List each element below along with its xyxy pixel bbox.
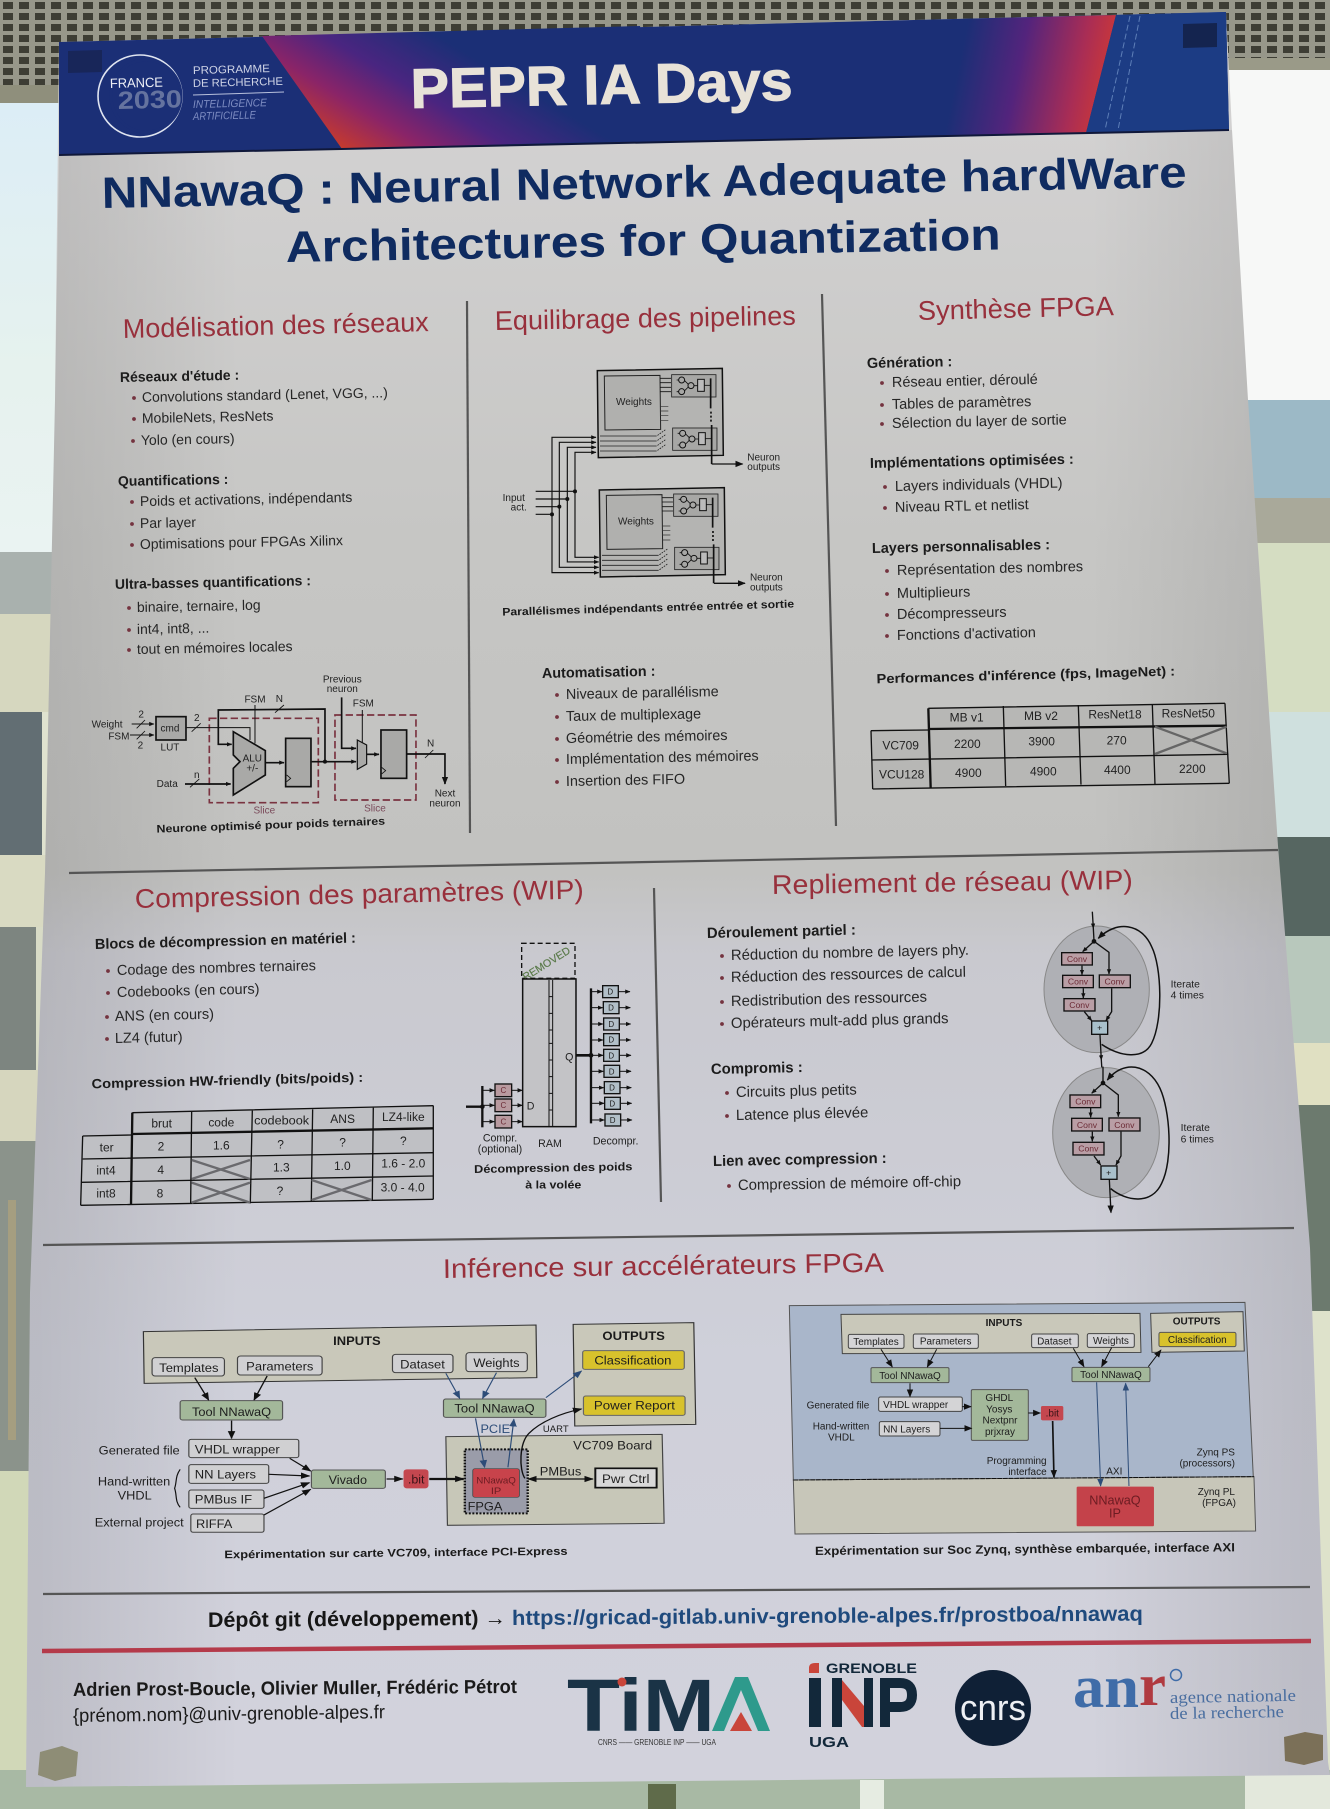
diagram: soc Zynq: Yosys bbox=[986, 1404, 1012, 1415]
diagram: neurone optimisé: Data bbox=[157, 779, 178, 790]
diagram: réseau replié: 6 times bbox=[1181, 1134, 1214, 1145]
diagram: carte VC709: Tool NNawaQ bbox=[454, 1402, 535, 1415]
list: blocs de décompression: ANS (en cours) bbox=[115, 1007, 214, 1025]
diagram: carte VC709: VC709 Board bbox=[573, 1439, 652, 1452]
diagram: soc Zynq: .bit bbox=[1046, 1409, 1059, 1420]
tape pieces bbox=[38, 1732, 1323, 1781]
logo text: programme de recherche bbox=[192, 63, 284, 123]
diagram: décompression RAM bbox=[466, 943, 638, 1191]
logo: France 2030 bbox=[98, 55, 182, 137]
diagram: carte VC709: INPUTS bbox=[333, 1334, 381, 1348]
title bbox=[101, 148, 1187, 272]
list: ultra-basses quantifications: binaire, ternaire, log bbox=[137, 597, 261, 615]
diagram: soc Zynq: Zynq PL bbox=[1198, 1487, 1235, 1498]
diagram: carte VC709: Weights bbox=[473, 1356, 520, 1370]
diagram: carte VC709: VHDL wrapper bbox=[195, 1442, 280, 1456]
diagram: neurone optimisé: 2 bbox=[138, 741, 144, 752]
diagram: décompression RAM: D bbox=[609, 1067, 615, 1076]
iterate 4 block: Conv bbox=[1067, 954, 1088, 964]
list: lien avec compression bbox=[713, 1151, 961, 1194]
list: compromis bbox=[711, 1060, 869, 1124]
performance table: 270 bbox=[1107, 733, 1127, 747]
diagram: soc Zynq: Tool NNawaQ bbox=[879, 1371, 941, 1382]
iterate 6 block: Conv bbox=[1077, 1120, 1098, 1130]
authors: Adrien Prost-Boucle, Olivier Muller, Frédéric Pétrot bbox=[73, 1677, 518, 1701]
iterate 4 block: Conv bbox=[1105, 977, 1125, 987]
diagram: soc Zynq: Templates bbox=[853, 1337, 899, 1348]
git repository line bbox=[208, 1603, 1143, 1632]
compression table: Compression HW-friendly (bits/poids) : bbox=[91, 1070, 363, 1091]
diagram: pipelines: Weights bbox=[618, 517, 654, 528]
heading: Repliement de réseau (WIP) bbox=[772, 865, 1133, 900]
diagram: décompression RAM: REMOVED bbox=[521, 945, 573, 983]
banner bbox=[59, 12, 1229, 155]
diagram: neurone optimisé: N bbox=[427, 739, 434, 750]
diagram: carte VC709: NN Layers bbox=[195, 1468, 256, 1481]
list: compromis: Circuits plus petits bbox=[736, 1082, 857, 1101]
diagram: carte VC709: FPGA bbox=[468, 1500, 503, 1513]
logo: CNRS: cnrs bbox=[960, 1687, 1026, 1728]
list: layers personnalisables: Décompresseurs bbox=[897, 605, 1007, 623]
diagram: décompression RAM: Décompression des poids bbox=[474, 1161, 633, 1176]
list: blocs de décompression: LZ4 (futur) bbox=[115, 1029, 183, 1047]
diagram: neurone optimisé: 2 bbox=[138, 709, 144, 720]
list: layers personnalisables: Fonctions d'activation bbox=[897, 625, 1036, 644]
diagram: carte VC709 bbox=[95, 1323, 696, 1561]
diagram: soc Zynq: Generated file bbox=[807, 1401, 870, 1412]
diagram: réseau replié: Iterate bbox=[1181, 1123, 1210, 1134]
logo: ANR: agence nationale bbox=[1170, 1686, 1296, 1707]
list: déroulement partiel: Déroulement partiel : bbox=[707, 923, 856, 942]
diagram: soc Zynq: Classification bbox=[1168, 1335, 1227, 1346]
diagram: pipelines: outputs bbox=[750, 582, 783, 593]
compression table: ANS bbox=[330, 1112, 355, 1126]
list: réseaux d'étude: MobileNets, ResNets bbox=[142, 407, 274, 426]
diagram: soc Zynq: Parameters bbox=[920, 1337, 971, 1348]
compression table: ? bbox=[400, 1134, 407, 1148]
diagram: carte VC709: UART bbox=[543, 1425, 569, 1435]
performance table: ResNet50 bbox=[1162, 706, 1215, 720]
logo: CNRS bbox=[955, 1670, 1031, 1746]
diagram: carte VC709: Vivado bbox=[329, 1473, 367, 1487]
panel: equilibrage des pipelines bbox=[495, 301, 796, 790]
diagram: neurone optimisé: ALU bbox=[243, 754, 262, 765]
list: génération bbox=[867, 354, 1067, 432]
diagram: carte VC709: PCIE bbox=[480, 1422, 510, 1436]
heading: Compression des paramètres (WIP) bbox=[134, 875, 584, 914]
list: ultra-basses quantifications bbox=[115, 572, 311, 657]
list: quantifications bbox=[118, 471, 353, 552]
diagram: carte VC709: Templates bbox=[159, 1361, 219, 1375]
panel: modélisation des réseaux bbox=[92, 307, 461, 836]
iterate 6 block: Conv bbox=[1075, 1096, 1096, 1106]
diagram: carte VC709: Parameters bbox=[246, 1359, 314, 1373]
list: déroulement partiel bbox=[707, 923, 969, 1032]
diagram: carte VC709: Hand-written bbox=[98, 1474, 170, 1488]
diagram: neurone optimisé bbox=[92, 675, 461, 836]
title: NNawaQ : Neural Network Adequate hardWare bbox=[101, 148, 1187, 218]
diagram: soc Zynq: GHDL bbox=[985, 1393, 1014, 1404]
list: blocs de décompression: Blocs de décompression en matériel : bbox=[95, 931, 356, 953]
diagram: carte VC709: IP bbox=[491, 1487, 501, 1497]
heading: Inférence sur accélérateurs FPGA bbox=[443, 1248, 884, 1284]
diagram: soc Zynq: prjxray bbox=[985, 1427, 1015, 1438]
diagram: décompression RAM: D bbox=[608, 1051, 614, 1060]
compression table: 1.6 bbox=[213, 1138, 230, 1152]
list: automatisation: Géométrie des mémoires bbox=[566, 728, 728, 747]
diagram: neurone optimisé: FSM bbox=[108, 731, 129, 742]
diagram: carte VC709: Generated file bbox=[99, 1443, 180, 1457]
list: layers personnalisables: Représentation des nombres bbox=[897, 559, 1083, 579]
list: quantifications: Par layer bbox=[140, 514, 196, 531]
logo: ANR: an bbox=[1073, 1654, 1139, 1720]
diagram: décompression RAM: RAM bbox=[538, 1138, 562, 1150]
diagram: neurone optimisé: neuron bbox=[429, 798, 461, 809]
list: blocs de décompression: Codebooks (en cours) bbox=[117, 982, 260, 1001]
diagram: soc Zynq: Programming bbox=[987, 1456, 1047, 1467]
compression table: brut bbox=[151, 1117, 173, 1131]
diagram: carte VC709: RIFFA bbox=[196, 1517, 233, 1531]
diagram: pipelines: Neuron bbox=[747, 453, 780, 464]
list: réseaux d'étude: Réseaux d'étude : bbox=[120, 367, 239, 385]
list: automatisation: Insertion des FIFO bbox=[566, 772, 685, 790]
diagram: neurone optimisé: Neurone optimisé pour poids ternaires bbox=[156, 816, 385, 836]
diagram: soc Zynq: Zynq PS bbox=[1197, 1448, 1235, 1459]
compression table: LZ4-like bbox=[382, 1110, 425, 1124]
compression table: 8 bbox=[157, 1187, 164, 1201]
logo: Grenoble INP bbox=[809, 1661, 917, 1751]
diagram: décompression RAM: D bbox=[609, 1099, 615, 1108]
diagram: décompression RAM: D bbox=[608, 1004, 614, 1013]
list: génération: Sélection du layer de sortie bbox=[892, 412, 1067, 432]
list: réseaux d'étude: Yolo (en cours) bbox=[141, 430, 235, 448]
diagram: carte VC709: Tool NNawaQ bbox=[192, 1405, 271, 1419]
logo: ANR bbox=[1073, 1652, 1296, 1723]
list: automatisation: Taux de multiplexage bbox=[566, 706, 701, 725]
diagram: carte VC709: VHDL bbox=[118, 1489, 152, 1502]
iterate 4 block: + bbox=[1097, 1023, 1102, 1033]
diagram: soc Zynq: VHDL bbox=[828, 1432, 855, 1443]
diagram: décompression RAM: à la volée bbox=[525, 1179, 581, 1191]
compression table: 2 bbox=[158, 1140, 165, 1154]
diagram: soc Zynq: INPUTS bbox=[986, 1318, 1023, 1329]
list: déroulement partiel: Redistribution des ressources bbox=[731, 990, 927, 1010]
list: lien avec compression: Compression de mémoire off-chip bbox=[738, 1174, 961, 1194]
title: Architectures for Quantization bbox=[285, 211, 1001, 272]
list: layers personnalisables: Layers personnalisables : bbox=[872, 537, 1050, 557]
diagram: carte VC709: Power Report bbox=[594, 1398, 675, 1412]
list: layers personnalisables bbox=[872, 537, 1083, 644]
list: quantifications: Poids et activations, indépendants bbox=[140, 489, 353, 509]
performance table: 2200 bbox=[954, 737, 981, 751]
diagram: réseau replié: Iterate bbox=[1171, 979, 1200, 990]
diagram: décompression RAM: D bbox=[607, 988, 613, 997]
performance table: MB v1 bbox=[950, 710, 984, 724]
diagram: soc Zynq: OUTPUTS bbox=[1173, 1317, 1221, 1328]
compression table: int8 bbox=[96, 1187, 116, 1201]
logo: ANR: de la recherche bbox=[1170, 1702, 1284, 1723]
compression table: codebook bbox=[254, 1113, 310, 1127]
compression table: int4 bbox=[96, 1163, 116, 1177]
logo: France 2030: 2030 bbox=[117, 85, 182, 115]
diagram: réseau replié bbox=[1044, 912, 1214, 1213]
diagram: carte VC709: PMBus bbox=[540, 1465, 582, 1478]
list: compromis: Compromis : bbox=[711, 1060, 803, 1078]
compression table: ter bbox=[100, 1141, 114, 1155]
diagram: neurone optimisé: cmd bbox=[161, 724, 179, 735]
logo text: programme de recherche: DE RECHERCHE bbox=[193, 76, 283, 90]
iterate 6 block bbox=[1053, 1067, 1169, 1213]
diagram: soc Zynq: Tool NNawaQ bbox=[1080, 1370, 1142, 1381]
diagram: pipelines: Parallélismes indépendants entrée entrée et sortie bbox=[502, 598, 794, 619]
diagram: carte VC709: Pwr Ctrl bbox=[602, 1472, 650, 1486]
diagram: neurone optimisé: FSM bbox=[244, 695, 266, 706]
diagram: décompression RAM: D bbox=[608, 1036, 614, 1045]
diagram: neurone optimisé: +/- bbox=[246, 764, 258, 775]
heading: Equilibrage des pipelines bbox=[495, 301, 796, 336]
diagram: carte VC709: Expérimentation sur carte VC709, interface PCI-Express bbox=[224, 1545, 568, 1561]
logo: ANR: r bbox=[1139, 1652, 1166, 1718]
authors: {prénom.nom}@univ-grenoble-alpes.fr bbox=[73, 1702, 386, 1727]
compression table: 1.0 bbox=[334, 1159, 351, 1173]
logo: Grenoble INP: GRENOBLE bbox=[826, 1661, 917, 1676]
logo text: programme de recherche: PROGRAMME bbox=[193, 63, 270, 77]
compression table: 3.0 - 4.0 bbox=[381, 1181, 425, 1195]
diagram: carte VC709: .bit bbox=[408, 1472, 425, 1486]
diagram: soc Zynq: (processors) bbox=[1179, 1459, 1235, 1470]
diagram: neurone optimisé: 2 bbox=[194, 713, 200, 724]
logo text: programme de recherche: ARTIFICIELLE bbox=[192, 109, 257, 123]
authors bbox=[73, 1677, 518, 1727]
diagram: pipelines: Weights bbox=[616, 397, 652, 408]
heading: Synthèse FPGA bbox=[917, 291, 1114, 326]
logo: TIMA: CNRS —— GRENOBLE INP —— UGA bbox=[598, 1738, 717, 1747]
diagram: pipelines: Input bbox=[503, 493, 525, 504]
list: ultra-basses quantifications: tout en mémoires locales bbox=[137, 638, 293, 657]
diagram: soc Zynq: NN Layers bbox=[883, 1424, 930, 1435]
diagram: décompression RAM: C bbox=[500, 1101, 506, 1110]
list: quantifications: Optimisations pour FPGAs Xilinx bbox=[140, 532, 343, 552]
logo: Grenoble INP: UGA bbox=[809, 1734, 849, 1751]
performance table: 4400 bbox=[1104, 763, 1131, 777]
compression table: 1.3 bbox=[273, 1161, 290, 1175]
list: automatisation bbox=[542, 664, 759, 790]
compression table: 1.6 - 2.0 bbox=[381, 1157, 426, 1171]
diagram: décompression RAM: (optional) bbox=[478, 1144, 522, 1156]
diagram: soc Zynq: NNawaQ bbox=[1089, 1493, 1141, 1507]
iterate 6 block: + bbox=[1106, 1167, 1111, 1177]
list: compromis: Latence plus élevée bbox=[736, 1105, 869, 1124]
diagram: soc Zynq: interface bbox=[1008, 1467, 1047, 1478]
compression table: 4 bbox=[157, 1163, 164, 1177]
diagram: carte VC709: PMBus IF bbox=[195, 1493, 252, 1506]
logo: TIMA: TiM bbox=[567, 1664, 715, 1747]
performance table: VCU128 bbox=[879, 768, 925, 782]
panel: repliement de réseau bbox=[707, 865, 1214, 1213]
list: génération: Tables de paramètres bbox=[892, 394, 1031, 413]
performance table: 3900 bbox=[1028, 735, 1055, 749]
diagram: soc Zynq: Nextpnr bbox=[982, 1416, 1018, 1427]
iterate 4 block: Conv bbox=[1068, 977, 1089, 987]
list: déroulement partiel: Opérateurs mult-add plus grands bbox=[731, 1011, 949, 1032]
performance table: Performances d'inférence (fps, ImageNet) : bbox=[876, 664, 1175, 686]
diagram: soc Zynq: Expérimentation sur Soc Zynq, synthèse embarquée, interface AXI bbox=[815, 1540, 1235, 1558]
diagram: décompression RAM: D bbox=[527, 1100, 535, 1112]
diagram: soc Zynq: VHDL wrapper bbox=[883, 1400, 949, 1411]
diagram: soc Zynq: AXI bbox=[1106, 1466, 1122, 1477]
compression table: code bbox=[208, 1115, 235, 1129]
performance table: VC709 bbox=[882, 738, 919, 752]
list: implémentations optimisées: Layers individuals (VHDL) bbox=[895, 475, 1063, 495]
git repository line: https://gricad-gitlab.univ-grenoble-alpes.fr/prostboa/nnawaq bbox=[512, 1603, 1143, 1630]
iterate 4 block bbox=[1044, 912, 1160, 1082]
diagram: décompression RAM: Decompr. bbox=[593, 1136, 638, 1148]
diagram: décompression RAM: D bbox=[608, 1020, 614, 1029]
diagram: neurone optimisé: N bbox=[276, 694, 283, 705]
diagram: neurone optimisé: neuron bbox=[327, 684, 358, 695]
compression table: ? bbox=[277, 1184, 284, 1198]
list: réseaux d'étude bbox=[120, 367, 388, 448]
diagram: neurone optimisé: Next bbox=[435, 789, 455, 800]
panel: compression des paramètres bbox=[81, 875, 638, 1205]
performance table: MB v2 bbox=[1024, 709, 1058, 723]
iterate 6 block: Conv bbox=[1114, 1120, 1135, 1130]
logo: France 2030: FRANCE bbox=[110, 75, 163, 91]
list: implémentations optimisées bbox=[870, 452, 1074, 516]
diagram: neurone optimisé: FSM bbox=[353, 699, 374, 710]
diagram: soc Zynq bbox=[789, 1302, 1256, 1558]
list: lien avec compression: Lien avec compression : bbox=[713, 1151, 887, 1170]
diagram: neurone optimisé: Previous bbox=[323, 675, 362, 686]
list: réseaux d'étude: Convolutions standard (Lenet, VGG, ...) bbox=[142, 384, 388, 405]
performance table: ResNet18 bbox=[1088, 708, 1142, 722]
diagram: décompression RAM: C bbox=[500, 1086, 506, 1095]
diagram: décompression RAM: D bbox=[610, 1116, 616, 1125]
performance table: 4900 bbox=[1030, 764, 1057, 778]
compression table: ? bbox=[339, 1136, 346, 1150]
heading: Modélisation des réseaux bbox=[122, 307, 430, 344]
list: blocs de décompression bbox=[95, 931, 356, 1047]
diagram: pipelines: act. bbox=[511, 503, 527, 514]
git repository line: Dépôt git (développement) → bbox=[208, 1607, 506, 1632]
list: déroulement partiel: Réduction des ressources de calcul bbox=[731, 965, 966, 986]
list: génération: Réseau entier, déroulé bbox=[892, 372, 1038, 391]
performance table bbox=[871, 664, 1229, 789]
panel: synthèse FPGA bbox=[867, 291, 1229, 789]
diagram: carte VC709: Classification bbox=[594, 1354, 671, 1367]
section dividers bbox=[42, 294, 1311, 1651]
diagram: soc Zynq: Weights bbox=[1093, 1336, 1129, 1347]
list: implémentations optimisées: Niveau RTL et netlist bbox=[895, 497, 1029, 516]
compression table: ? bbox=[277, 1137, 284, 1151]
diagram: carte VC709: Dataset bbox=[400, 1357, 445, 1371]
diagram: soc Zynq: (FPGA) bbox=[1202, 1498, 1236, 1509]
diagram: soc Zynq: IP bbox=[1109, 1507, 1121, 1521]
list: automatisation: Implémentation des mémoires bbox=[566, 748, 759, 768]
diagram: pipelines: outputs bbox=[747, 462, 780, 473]
compression table bbox=[81, 1070, 433, 1205]
diagram: neurone optimisé: Weight bbox=[92, 719, 123, 730]
panel: inférence sur accélérateurs FPGA bbox=[95, 1248, 1256, 1561]
logo text: programme de recherche: INTELLIGENCE bbox=[193, 97, 268, 111]
diagram: carte VC709: NNawaQ bbox=[476, 1476, 516, 1486]
diagram: décompression RAM: C bbox=[500, 1117, 506, 1126]
performance table: 2200 bbox=[1179, 762, 1206, 776]
diagram: décompression RAM: Compr. bbox=[483, 1133, 517, 1145]
list: blocs de décompression: Codage des nombres ternaires bbox=[117, 958, 316, 979]
list: déroulement partiel: Réduction du nombre de layers phy. bbox=[731, 943, 969, 964]
logo: TIMA bbox=[567, 1664, 770, 1747]
list: layers personnalisables: Multiplieurs bbox=[897, 584, 970, 602]
list: génération: Génération : bbox=[867, 354, 952, 372]
diagram: réseau replié: 4 times bbox=[1171, 991, 1204, 1002]
diagram: pipelines bbox=[502, 368, 794, 619]
diagram: neurone optimisé: Slice bbox=[253, 806, 276, 817]
diagram: pipelines: Neuron bbox=[750, 573, 783, 584]
diagram: soc Zynq: Dataset bbox=[1037, 1336, 1072, 1347]
diagram: carte VC709: External project bbox=[95, 1516, 184, 1529]
list: implémentations optimisées: Implémentations optimisées : bbox=[870, 452, 1074, 472]
list: ultra-basses quantifications: int4, int8, ... bbox=[137, 620, 209, 637]
diagram: neurone optimisé: LUT bbox=[161, 742, 179, 753]
list: automatisation: Niveaux de parallélisme bbox=[566, 684, 719, 703]
diagram: décompression RAM: Q bbox=[565, 1051, 573, 1063]
iterate 4 block: Conv bbox=[1069, 1000, 1090, 1010]
diagram: carte VC709: OUTPUTS bbox=[602, 1329, 665, 1343]
diagram: soc Zynq: Hand-written bbox=[813, 1421, 869, 1432]
performance table: 4900 bbox=[955, 766, 982, 780]
list: automatisation: Automatisation : bbox=[542, 664, 656, 682]
diagram: décompression RAM: D bbox=[609, 1084, 615, 1093]
diagram: neurone optimisé: Slice bbox=[364, 803, 386, 814]
banner title: PEPR IA Days bbox=[410, 49, 793, 120]
list: ultra-basses quantifications: Ultra-basses quantifications : bbox=[115, 572, 311, 592]
diagram: neurone optimisé: n bbox=[194, 770, 200, 781]
list: quantifications: Quantifications : bbox=[118, 471, 228, 489]
iterate 6 block: Conv bbox=[1078, 1144, 1099, 1154]
